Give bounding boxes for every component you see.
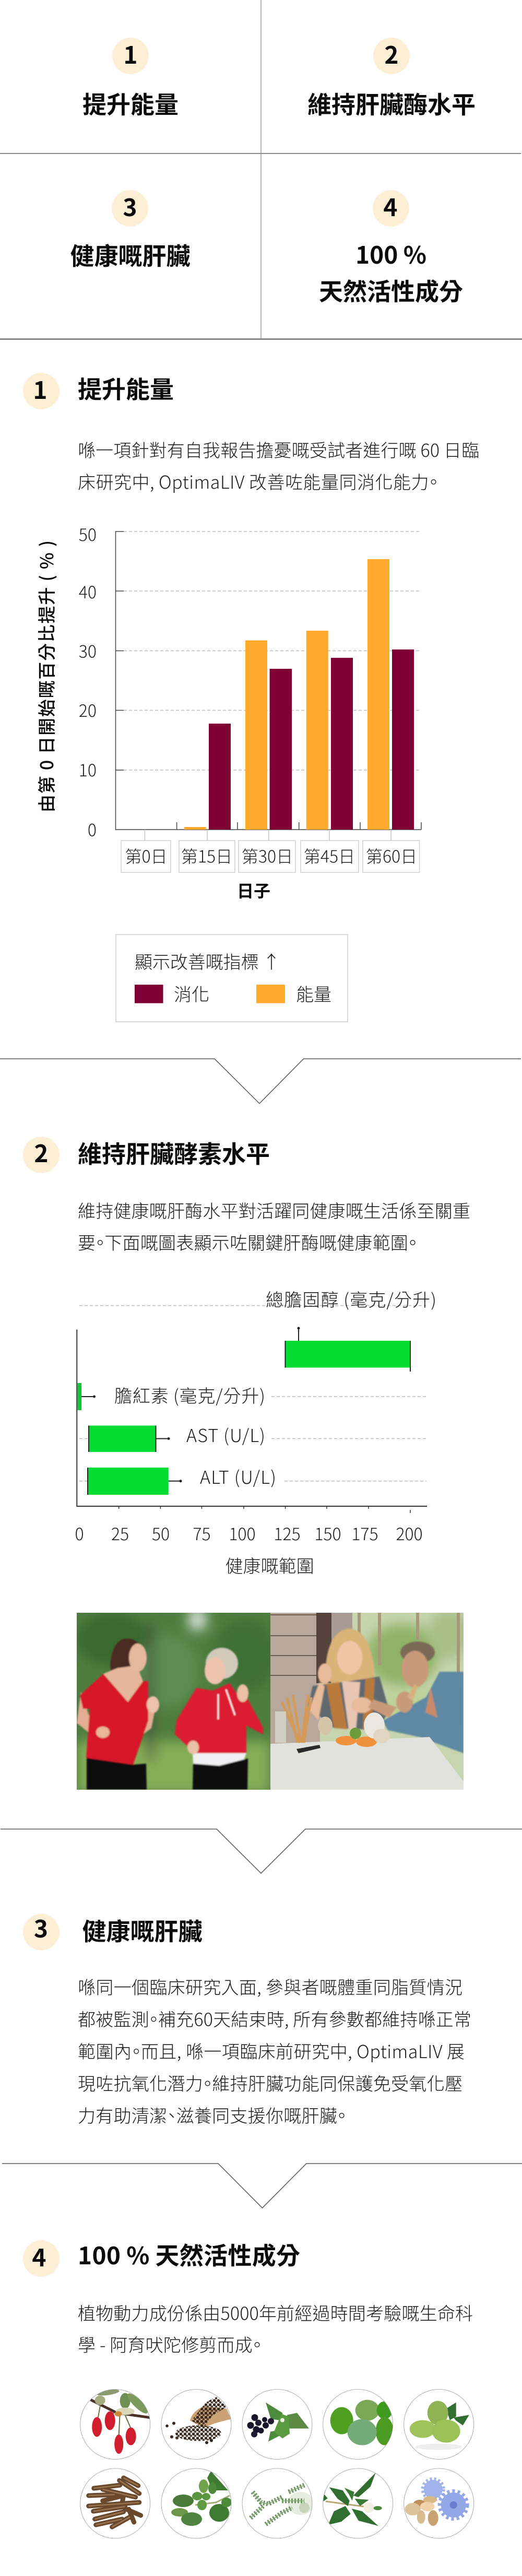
bars: energy [184,559,389,830]
section 3 text: 現咗抗氧化潛力。維持肝臟功能同保護免受氧化壓 [78,2070,462,2096]
overview card 3: 3 [123,189,137,223]
ingredient: chicory flowers and roots [404,2468,474,2538]
section 3 heading: 3 [34,1910,48,1945]
chart legend: 消化 [174,980,209,1006]
range: AST [89,1422,265,1452]
section 4 text: 植物動力成份係由5000年前經過時間考驗嘅生命科 [78,2299,473,2325]
ingredient: black pepper in scoop [161,2389,231,2459]
section 4 text: 學 - 阿育吠陀修剪而成。 [78,2331,262,2357]
overview card 2: 維持肝臟酶水平 [307,86,476,121]
range: ALT [88,1463,276,1495]
x axis tick labels: 175 [351,1521,378,1545]
section 3 text [78,1974,471,2128]
ingredient: green haritaki fruits [404,2389,474,2459]
section 4 text [78,2299,473,2357]
section 2 text [78,1197,470,1255]
x axis tick labels: 200 [396,1521,423,1545]
x axis tick labels: 50 [152,1521,170,1545]
x axis tick labels: 75 [193,1521,211,1545]
x axis day labels: 第15日 [181,844,232,868]
x axis title: 日子 [237,878,270,902]
overview grid: four benefits [0,0,522,339]
overview card 2 [307,37,476,121]
photo: couple eating at an outdoor table [270,1608,470,1790]
bars: digestion [209,649,414,830]
section 1 text: 床研究中, OptimaLIV 改善咗能量同消化能力。 [78,468,438,494]
jogger in red t-shirt [77,1638,159,1790]
section 2 text: 要。下面嘅圖表顯示咗關鍵肝酶嘅健康範圍。 [78,1229,417,1255]
overview card 4: 100 % [355,237,426,271]
y axis tick labels: 10 [79,758,97,782]
divider arrow 1 [0,1059,521,1104]
overview card 1: 1 [123,37,138,71]
range chart: healthy liver enzyme ranges [75,1286,436,1578]
overview card 2: 2 [384,37,399,71]
jogger in red hoodie [175,1648,263,1790]
section 1 heading: 提升能量 [78,371,174,405]
range: total cholesterol [266,1286,436,1372]
chart legend: 顯示改善嘅指標 ↑ [135,948,280,974]
divider arrow 2 [1,1829,522,1873]
ingredient: black berries with leaves [242,2389,312,2459]
x axis tick labels: 125 [274,1521,301,1545]
y axis tick labels: 0 [88,818,97,842]
section 3 text: 範圍內。而且, 喺一項臨床前研究中, OptimaLIV 展 [78,2038,465,2063]
ingredient: dried roots [80,2468,150,2538]
x axis day labels: 第30日 [242,844,293,868]
x axis day labels: 第60日 [366,844,417,868]
overview card 3 [70,189,190,272]
section 4 heading: 100 % 天然活性成分 [78,2237,300,2272]
section 1 heading [23,371,174,409]
ingredient: sage green sprig [242,2468,314,2538]
man in denim jacket [368,1641,464,1753]
y axis tick labels [79,522,97,842]
section 2 heading: 維持肝臟酵素水平 [78,1136,270,1170]
section 4 heading [23,2237,300,2277]
y axis tick labels: 20 [79,698,97,722]
y axis tick labels: 50 [79,522,97,546]
photo: two women jogging in a park [76,1608,277,1793]
ingredient: red berries [80,2388,150,2459]
section 3 heading [23,1910,203,1951]
section 3 heading: 健康嘅肝臟 [82,1913,203,1947]
y axis tick labels: 30 [79,639,97,663]
chart legend: 能量 [296,980,331,1006]
overview card 1 [82,37,179,121]
overview card 3: 健康嘅肝臟 [70,238,190,272]
x axis tick labels: 150 [314,1521,341,1545]
section 2 text: 維持健康嘅肝酶水平對活躍同健康嘅生活係至關重 [78,1197,470,1223]
section 3 text: 喺同一個臨床研究入面, 參與者嘅體重同脂質情況 [78,1974,462,1999]
section 4 heading: 4 [32,2239,46,2274]
section 1 text: 喺一項針對有自我報告擔憂嘅受試者進行嘅 60 日臨 [78,436,479,462]
section 2 heading: 2 [34,1135,49,1169]
bar chart: improvement by day [33,522,421,902]
ingredient: pointed dark leaves with white flower [323,2468,393,2538]
x axis day labels [121,841,420,872]
overview card 4: 4 [383,189,398,223]
y axis tick labels: 40 [79,580,97,604]
x axis day labels: 第0日 [125,844,168,868]
range: total cholesterol: 總膽固醇 (毫克/分升) [266,1286,436,1311]
section 1 text [78,436,479,494]
ingredient: gotu kola leaves [323,2389,394,2459]
ingredient: round green leaves on stem [161,2468,232,2538]
x axis day labels: 第45日 [304,844,355,868]
x axis title: 健康嘅範圍 [226,1552,314,1578]
chart legend [116,935,348,1022]
x axis tick labels: 25 [111,1521,129,1545]
range: bilirubin: 膽紅素 (毫克/分升) [114,1382,265,1408]
x axis tick labels: 100 [229,1521,256,1545]
divider arrow 3 [2,2164,522,2208]
range: ALT: ALT (U/L) [200,1463,276,1489]
table with food [270,1695,464,1790]
x axis tick labels: 0 [75,1521,84,1545]
woman with blonde hair [308,1628,389,1730]
range: AST: AST (U/L) [186,1422,265,1447]
section 3 text: 都被監測。補充60天結束時, 所有參數都維持喺正常 [78,2006,471,2031]
section 1 heading: 1 [33,372,48,406]
overview card 4: 天然活性成分 [319,273,463,308]
y axis title: 由第 0 日開始嘅百分比提升 ( % ) [33,540,58,812]
x axis tick labels [75,1521,423,1545]
overview card 1: 提升能量 [82,86,179,121]
overview card 4 [319,189,463,308]
section 3 text: 力有助清潔、滋養同支援你嘅肝臟。 [78,2102,346,2128]
